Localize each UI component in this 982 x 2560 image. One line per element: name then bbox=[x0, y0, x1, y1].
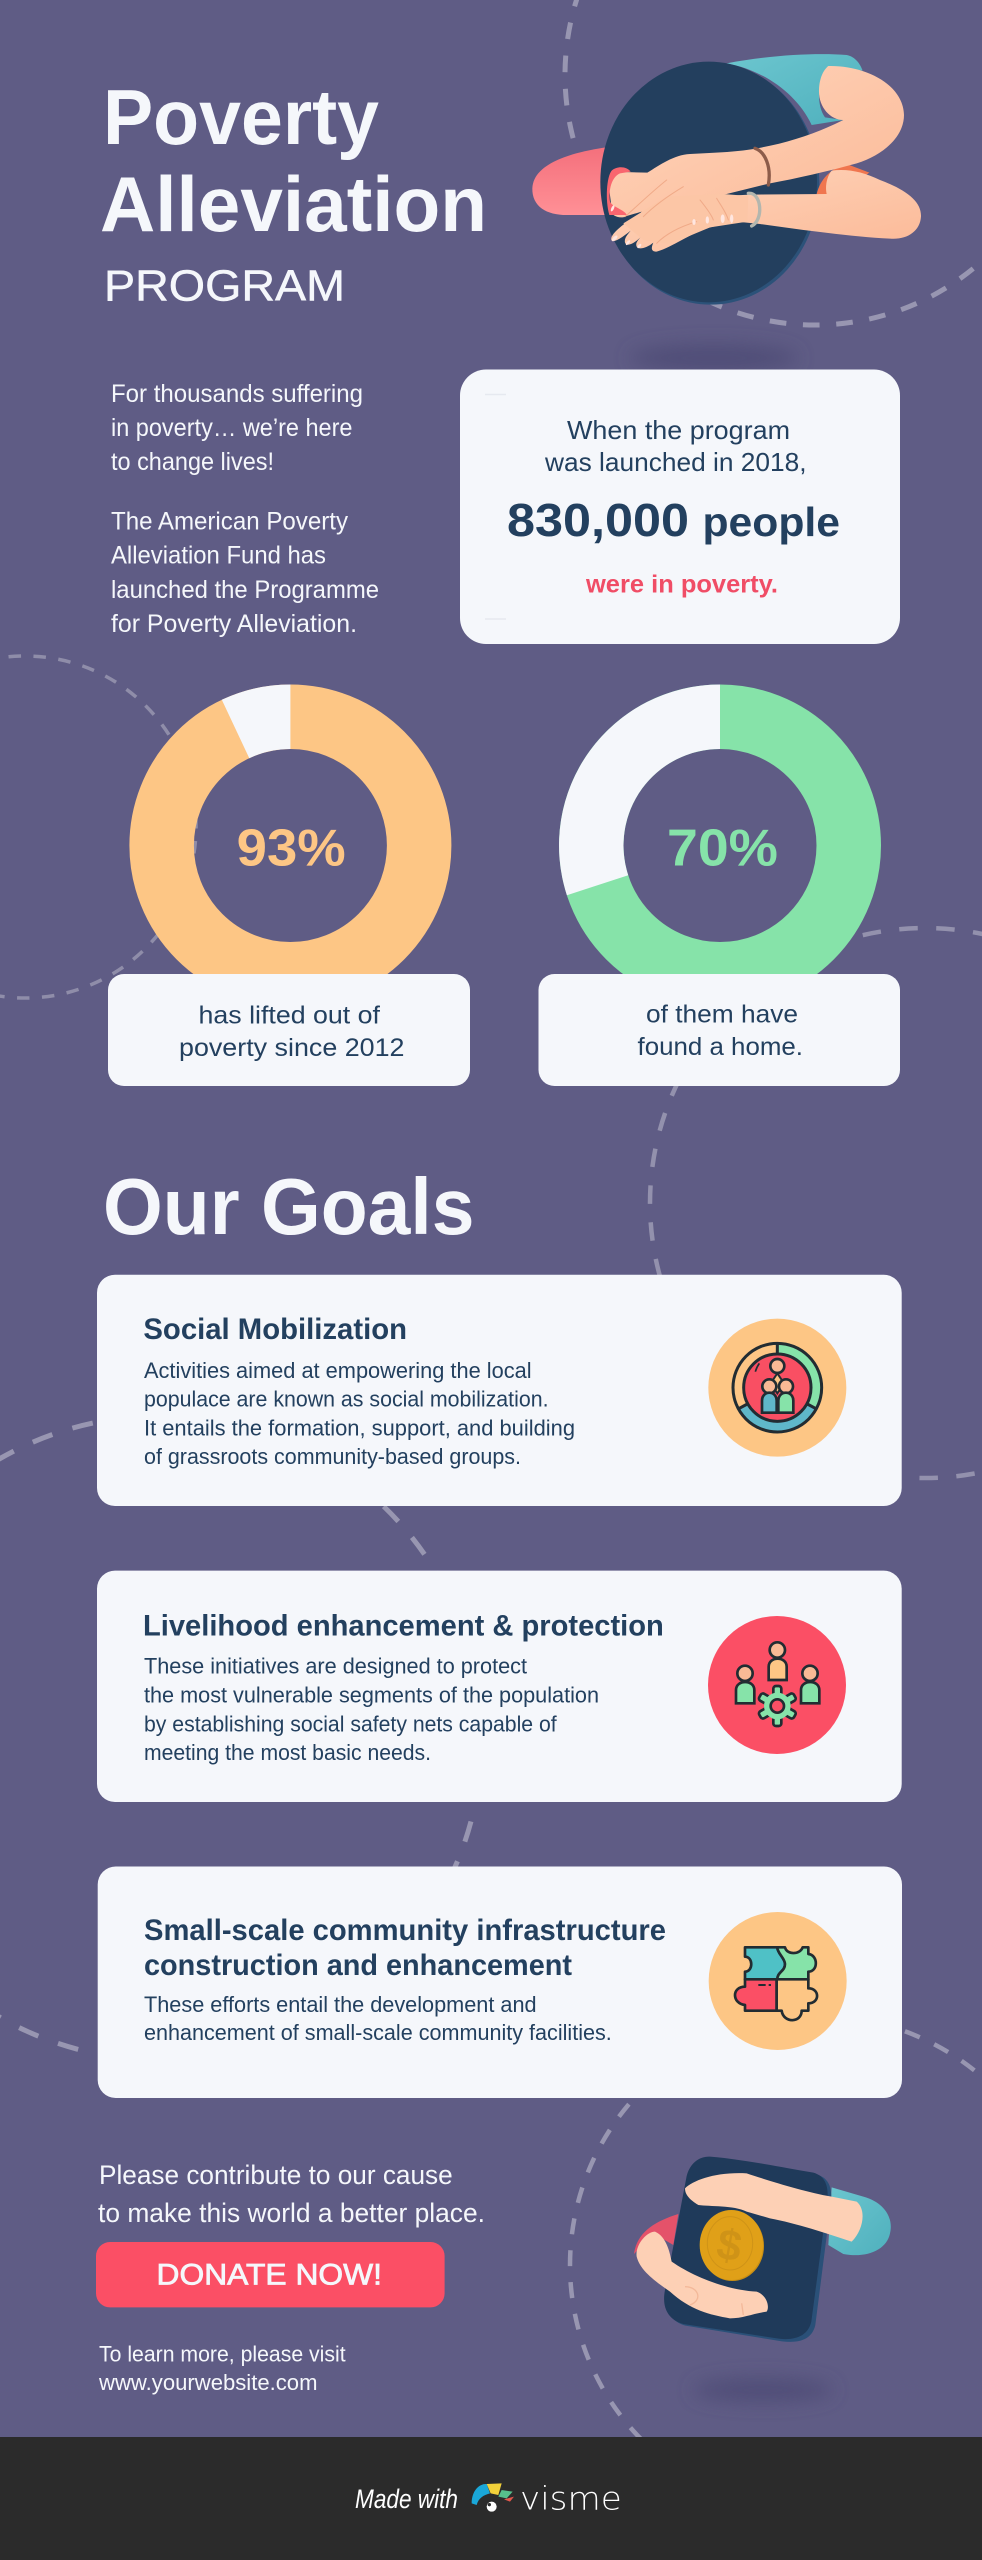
website text: To learn more, please visit bbox=[99, 2342, 346, 2367]
card: program launch statistic: 830,000 bbox=[507, 494, 689, 546]
heading: our goals: Our Goals bbox=[103, 1162, 474, 1251]
fingers and nails bbox=[625, 180, 728, 243]
illustration: arms wrapped around a disc bbox=[532, 54, 921, 305]
illustration: hands holding a coin bbox=[634, 2157, 891, 2342]
goal card: community infrastructure: enhancement of small-scale community facilities. bbox=[144, 2020, 612, 2045]
intro text: The American Poverty bbox=[111, 508, 348, 536]
call to action text bbox=[98, 2160, 485, 2228]
goal card: livelihood enhancement: These initiatives are designed to protect bbox=[144, 1654, 527, 1679]
intro text: for Poverty Alleviation. bbox=[111, 610, 357, 638]
footer bar bbox=[0, 2437, 982, 2560]
card: program launch statistic bbox=[460, 370, 900, 644]
illustration shadow: hero bbox=[630, 344, 798, 372]
card: program launch statistic: was launched in 2018, bbox=[544, 447, 806, 477]
icon: puzzle pieces bbox=[709, 1912, 847, 2050]
hands mass bbox=[623, 194, 748, 244]
title: Alleviation bbox=[100, 160, 487, 248]
bottom hand bbox=[637, 2232, 768, 2318]
donate button bbox=[96, 2242, 445, 2307]
card: program launch statistic: were in poverty. bbox=[585, 570, 778, 598]
goal card: livelihood enhancement: meeting the most basic needs. bbox=[144, 1740, 431, 1765]
caption: 70%: of them have bbox=[646, 1000, 798, 1028]
goal card: social mobilization: of grassroots community-based groups. bbox=[144, 1444, 521, 1469]
teal sleeve bbox=[828, 2187, 891, 2255]
goal card: livelihood enhancement: the most vulnerable segments of the population bbox=[144, 1682, 599, 1707]
donate button: DONATE NOW! bbox=[156, 2259, 382, 2292]
goal card: livelihood enhancement: Livelihood enhancement & protection bbox=[143, 1609, 664, 1642]
goal card: livelihood enhancement: by establishing social safety nets capable of bbox=[144, 1711, 558, 1736]
intro text: launched the Programme bbox=[111, 576, 379, 604]
dark tile rim bbox=[666, 2158, 831, 2342]
intro text: Alleviation Fund has bbox=[111, 542, 326, 570]
title: PROGRAM bbox=[104, 262, 345, 310]
gold coin bbox=[700, 2210, 764, 2281]
silver bracelet bbox=[748, 193, 760, 226]
title: Poverty bbox=[103, 73, 379, 161]
card: program launch statistic: When the program bbox=[567, 415, 790, 445]
brown bracelet bbox=[755, 148, 769, 185]
top hand bbox=[685, 2173, 863, 2242]
visme wordmark: visme bbox=[520, 2479, 622, 2517]
icon: team and gear bbox=[708, 1616, 846, 1754]
donut chart: 70%: 70% bbox=[667, 820, 778, 878]
orange sleeve bbox=[817, 164, 869, 197]
dark disc bbox=[600, 62, 817, 302]
dark disc rim bbox=[602, 63, 819, 305]
caption: 93%: has lifted out of bbox=[198, 1002, 380, 1030]
intro text: in poverty… we’re here bbox=[111, 414, 352, 442]
goal card: social mobilization: It entails the formation, support, and building bbox=[144, 1416, 575, 1440]
goal card: livelihood enhancement bbox=[97, 1571, 902, 1802]
visme logo bbox=[472, 2483, 514, 2512]
caption: 93%: poverty since 2012 bbox=[179, 1034, 404, 1062]
goal card: social mobilization: Activities aimed at empowering the local bbox=[144, 1358, 532, 1383]
caption: 70%: found a home. bbox=[638, 1033, 803, 1061]
icon: people in ring bbox=[708, 1319, 846, 1457]
red sleeve bbox=[634, 2214, 678, 2254]
gold coin: $ bbox=[713, 2220, 745, 2272]
card: program launch statistic: people bbox=[702, 499, 840, 545]
donut chart: 70% bbox=[559, 684, 849, 974]
goal card: community infrastructure: construction and enhancement bbox=[144, 1949, 572, 1982]
intro text bbox=[111, 380, 379, 638]
made with label: Made with bbox=[355, 2484, 458, 2514]
upper arm and hand bbox=[609, 66, 904, 222]
title bbox=[100, 73, 487, 310]
donut chart: 93% bbox=[162, 684, 419, 974]
caption: 93% bbox=[108, 974, 470, 1086]
coral cuff bbox=[607, 167, 631, 215]
illustration shadow: coin bbox=[693, 2378, 833, 2402]
teal sleeve bbox=[727, 54, 863, 125]
dark tile bbox=[664, 2157, 828, 2339]
website text: www.yourwebsite.com bbox=[98, 2370, 318, 2395]
goal card: community infrastructure: Small-scale community infrastructure bbox=[144, 1914, 666, 1947]
goal card: social mobilization: populace are known as social mobilization. bbox=[144, 1386, 548, 1412]
goal card: social mobilization bbox=[97, 1275, 902, 1506]
coral sleeve bbox=[532, 147, 630, 215]
caption: 70% bbox=[538, 974, 900, 1086]
goal card: social mobilization: Social Mobilization bbox=[143, 1313, 407, 1346]
intro text: For thousands suffering bbox=[111, 380, 363, 408]
call to action text: Please contribute to our cause bbox=[99, 2160, 453, 2190]
lower arm and hand bbox=[611, 170, 921, 252]
goal card: community infrastructure bbox=[98, 1866, 902, 2098]
call to action text: to make this world a better place. bbox=[98, 2198, 485, 2228]
goal card: community infrastructure: These efforts entail the development and bbox=[144, 1992, 537, 2017]
website text bbox=[98, 2342, 346, 2395]
donut chart: 93%: 93% bbox=[237, 820, 346, 878]
intro text: to change lives! bbox=[111, 448, 274, 476]
